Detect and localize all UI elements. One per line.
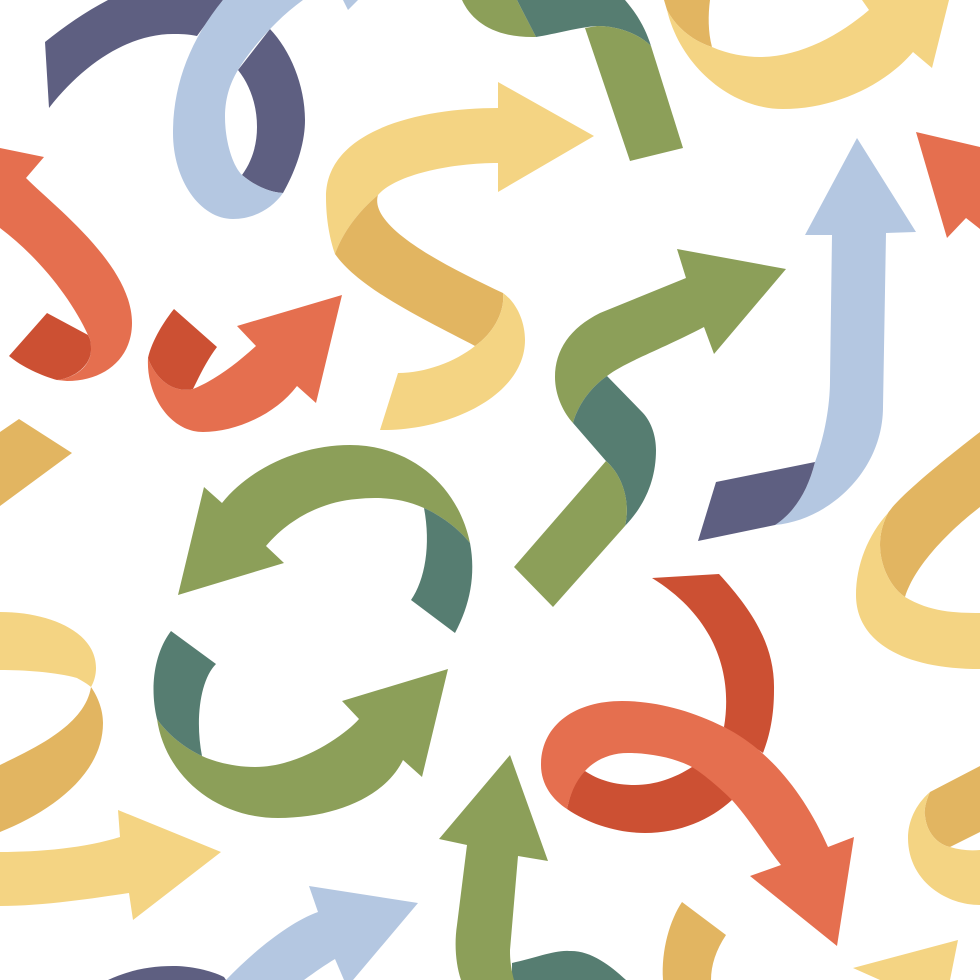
arrowhead: dark yellow, left edge	[0, 419, 72, 506]
arrow: yellow S curve	[326, 82, 594, 430]
ribbon end: dark yellow, bottom centre	[663, 902, 726, 980]
arrow: green recycling lower	[154, 631, 448, 818]
arrow: yellow ribbon, bottom right edge	[908, 766, 980, 905]
arrow: green upward, bottom centre	[439, 755, 626, 980]
arrow: navy and light blue loop, top left	[45, 0, 358, 219]
arrow: yellow ribbon, left edge	[0, 612, 103, 832]
arrow: light blue, bottom	[108, 886, 418, 980]
arrowhead: yellow, bottom right edge	[853, 940, 958, 980]
arrow: yellow pointing right, bottom left	[0, 810, 221, 920]
arrow: yellow top, curving to upper right	[664, 0, 949, 109]
arrowhead: orange, right edge	[916, 132, 980, 238]
arrow: small orange curl	[148, 295, 342, 432]
arrow: yellow ribbon, right edge	[856, 432, 980, 669]
arrow: orange hook, left edge	[0, 148, 132, 381]
arrow: green and teal zigzag	[514, 249, 786, 607]
arrow: red and orange loop pointing down right	[541, 574, 854, 946]
arrow: green and teal, top centre	[462, 0, 683, 161]
arrow: green recycling upper	[178, 445, 472, 633]
arrow: light blue upward with navy tail	[698, 138, 916, 541]
